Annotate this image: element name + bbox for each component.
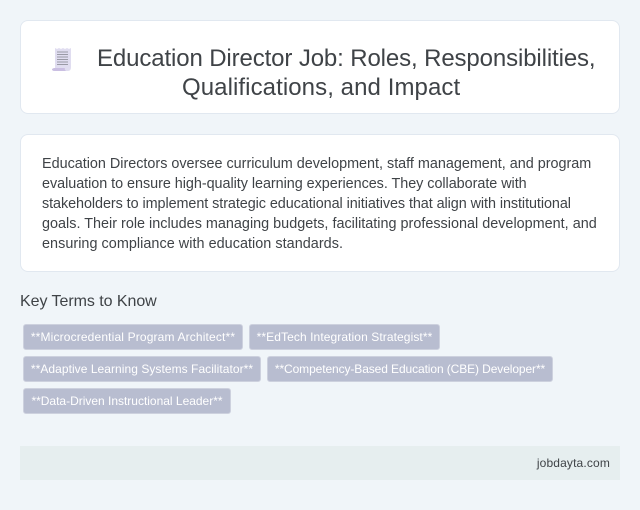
title: Education Director Job: Roles, Responsibilities, (97, 45, 595, 72)
tag (249, 324, 440, 350)
tag (23, 388, 231, 414)
tag (23, 356, 261, 382)
title: Qualifications, and Impact (182, 74, 460, 101)
tag (267, 356, 553, 382)
tag list (23, 324, 553, 414)
summary text (42, 156, 597, 252)
heading: key terms: Key Terms to Know (20, 293, 157, 310)
icon: document scroll (52, 48, 71, 71)
tag: **Competency-Based Education (CBE) Developer** (275, 362, 545, 376)
summary text: stakeholders to implement strategic educational initiatives that align with institutional (42, 196, 571, 212)
tag: **Microcredential Program Architect** (31, 330, 235, 344)
panel: summary card (20, 134, 620, 272)
tag: **EdTech Integration Strategist** (257, 330, 432, 344)
summary text: Education Directors oversee curriculum development, staff management, and program (42, 156, 591, 172)
panel: title card (20, 20, 620, 114)
footer bar (20, 446, 620, 480)
summary text: ensuring compliance with education standards. (42, 236, 343, 252)
summary text: goals. Their role includes managing budgets, facilitating professional development, and (42, 216, 597, 232)
tag: **Adaptive Learning Systems Facilitator** (31, 362, 253, 376)
tag: **Data-Driven Instructional Leader** (31, 394, 223, 408)
footer source: jobdayta.com (537, 456, 610, 470)
tag (23, 324, 243, 350)
title (97, 45, 595, 101)
summary text: evaluation to ensure high-quality learning experiences. They collaborate with (42, 176, 527, 192)
